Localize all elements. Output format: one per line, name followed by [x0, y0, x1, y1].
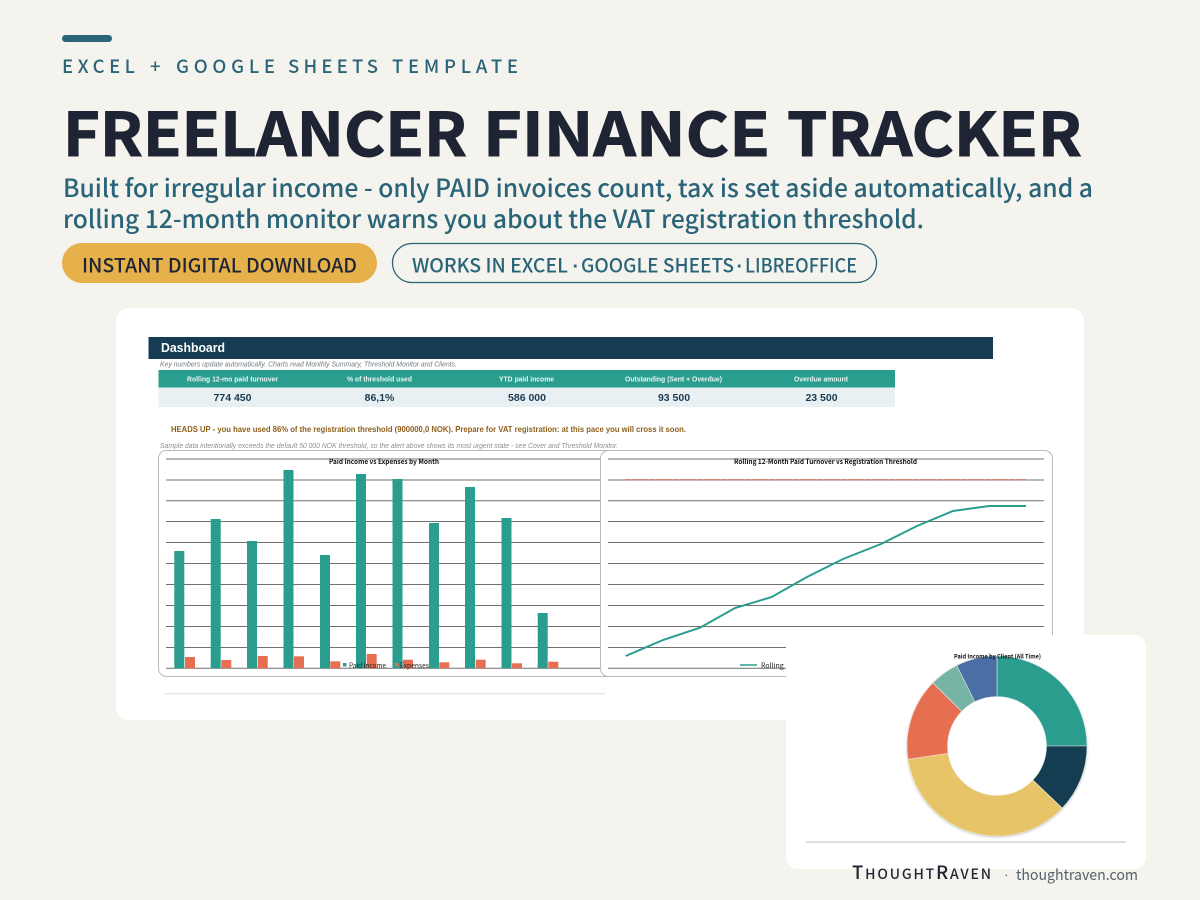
- subtitle: rolling 12-month monitor warns you about the VAT registration threshold.: [63, 200, 924, 236]
- chart title: Rolling 12-Month Paid Turnover vs Registration Threshold: [734, 457, 917, 467]
- subtitle: Built for irregular income - only PAID invoices count, tax is set aside automatically, and a: [63, 169, 1093, 205]
- title: TRACKER: [787, 87, 1082, 174]
- accent bar: [62, 35, 112, 42]
- badge: compatibility: GOOGLE SHEETS: [581, 250, 734, 278]
- bar chart: paid income vs expenses: [158, 450, 618, 676]
- badge: instant digital download: [62, 243, 377, 283]
- website: thoughtraven.com: [1016, 864, 1138, 885]
- KPI table: 93 500: [658, 392, 690, 404]
- chart legend: [343, 661, 430, 671]
- panel: donut chart card: [786, 635, 1146, 869]
- title: [63, 87, 1082, 174]
- badge: compatibility: WORKS IN EXCEL: [412, 250, 568, 278]
- slice: yellow client: [908, 753, 1062, 836]
- turnover line: [626, 506, 1026, 656]
- orange bars: expenses: [185, 654, 558, 668]
- eyebrow: template label: SHEETS: [288, 53, 378, 79]
- KPI table: [158, 370, 895, 407]
- brand footer: [852, 859, 1138, 885]
- donut title: Paid Income by Client (All Time): [954, 652, 1041, 660]
- alert message: HEADS UP - you have used 86% of the registration threshold (900000,0 NOK). Prepare for VAT registration: at this pace you will cross it soon.: [171, 425, 686, 434]
- dashboard note: Key numbers update automatically. Charts read Monthly Summary, Threshold Monitor and Clients.: [160, 360, 457, 368]
- badge: compatibility: [392, 244, 876, 282]
- chart legend: Expenses: [400, 661, 430, 671]
- KPI table: Outstanding (Sent + Overdue): [625, 376, 722, 384]
- KPI table: Rolling 12-mo paid turnover: [187, 376, 278, 384]
- KPI table: 23 500: [805, 392, 838, 404]
- card divider: [164, 693, 605, 694]
- slice: navy client: [1033, 746, 1087, 808]
- teal bars: paid income: [174, 470, 548, 668]
- badge: compatibility: ·: [572, 256, 579, 278]
- title: FINANCE: [483, 87, 770, 174]
- eyebrow: template label: TEMPLATE: [392, 53, 518, 79]
- eyebrow: template label: [62, 53, 518, 79]
- slice: orange client: [907, 683, 962, 759]
- subtitle: [63, 169, 1093, 236]
- threshold dashed line: [625, 479, 1026, 481]
- eyebrow: template label: +: [150, 53, 161, 79]
- chart title: Paid Income vs Expenses by Month: [329, 457, 439, 467]
- KPI table: 586 000: [508, 392, 546, 404]
- KPI table: 774 450: [214, 392, 252, 404]
- separator dot: ·: [1004, 866, 1009, 882]
- badge: compatibility: LIBREOFFICE: [745, 250, 857, 278]
- slice: teal client: [997, 656, 1087, 746]
- badge: compatibility: ·: [736, 256, 743, 278]
- card divider: [806, 842, 1126, 843]
- logo wordmark: THOUGHTRAVEN: [852, 859, 991, 885]
- dashboard header bar: [148, 337, 993, 359]
- line chart: rolling turnover vs threshold: [600, 450, 1052, 676]
- eyebrow: template label: GOOGLE: [176, 53, 275, 79]
- sample data note: Sample data intentionally exceeds the default 50 000 NOK threshold, so the alert above shows its most urgent state - see Cover and Threshold Monitor.: [160, 441, 618, 450]
- donut chart: paid income by client: [907, 656, 1087, 837]
- chart legend: Paid Income: [349, 661, 386, 671]
- slice: blue client: [957, 656, 997, 702]
- eyebrow: template label: EXCEL: [62, 53, 135, 79]
- slice: sage client: [933, 666, 975, 711]
- KPI table: 86,1%: [365, 392, 395, 404]
- KPI table: YTD paid income: [499, 376, 554, 384]
- badge: instant digital download: INSTANT DIGITAL DOWNLOAD: [82, 250, 357, 278]
- title: FREELANCER: [63, 87, 467, 174]
- panel: dashboard screenshot card: [116, 308, 1084, 720]
- KPI table: % of threshold used: [347, 376, 412, 384]
- KPI table: Overdue amount: [794, 376, 849, 384]
- chart legend: Rolling 12-Month: [761, 661, 817, 671]
- dashboard header bar: Dashboard: [161, 341, 225, 355]
